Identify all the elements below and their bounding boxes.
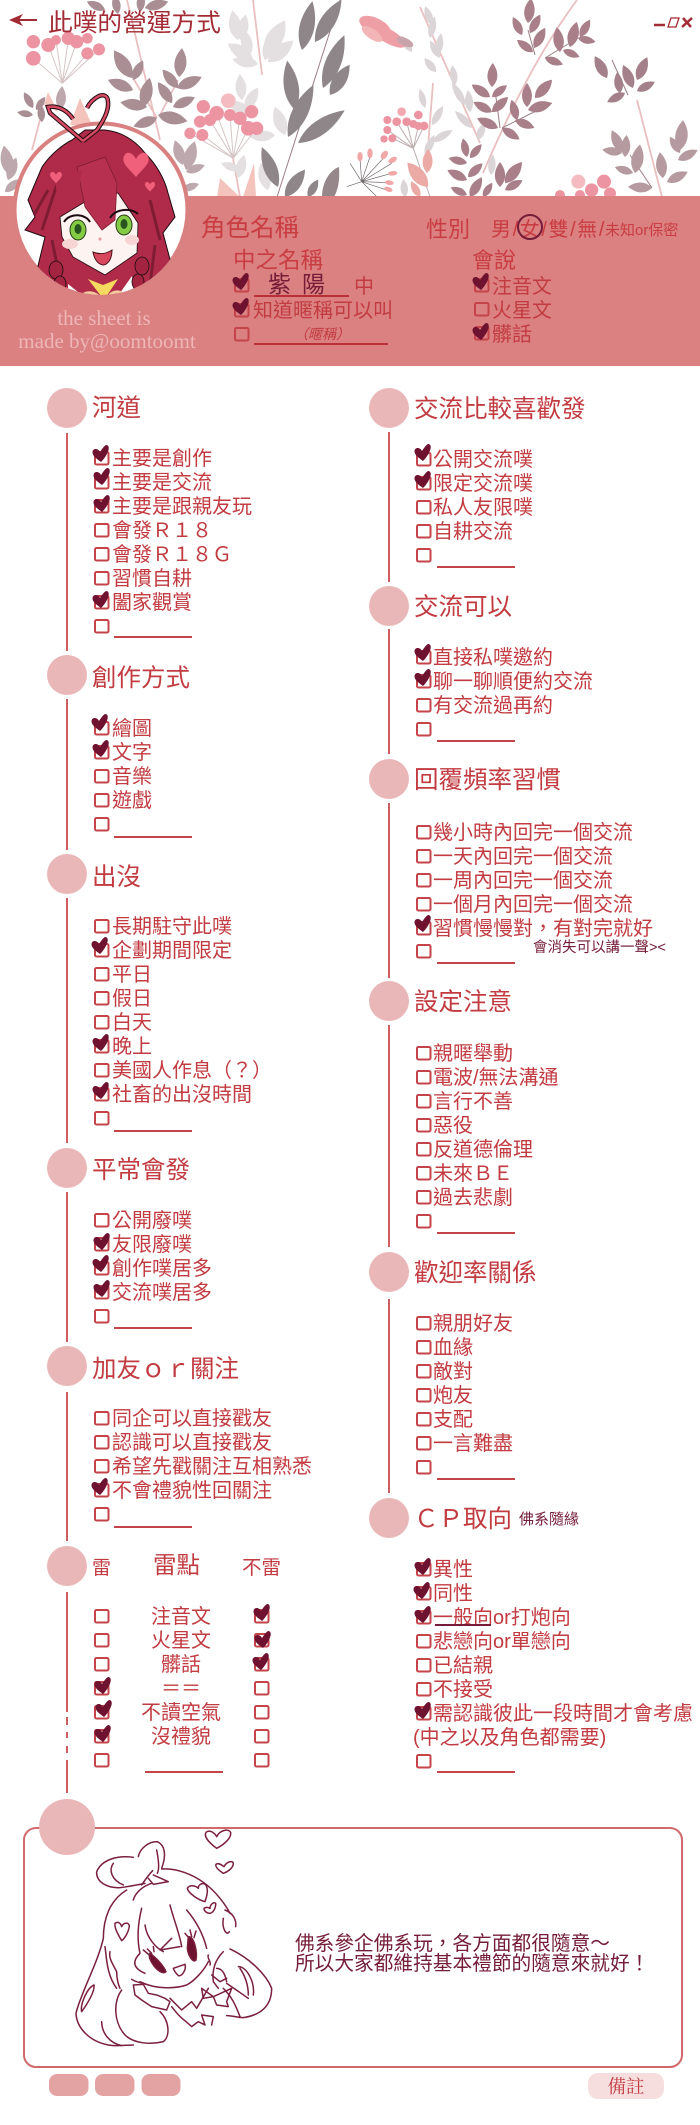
- timeline line: [388, 432, 390, 582]
- option: 晚上 checked: 晚上: [112, 1035, 152, 1058]
- light mauve sprigs: [0, 86, 206, 195]
- row: 不讀空氣: [95, 1700, 268, 1724]
- berry clusters and dandelion right: [347, 107, 616, 200]
- marker circle: [369, 759, 409, 799]
- mauve sprig left: [17, 0, 204, 131]
- field: 會說: 會說: [472, 248, 516, 273]
- section: 創作方式: [47, 655, 192, 850]
- option: 反道德倫理: 反道德倫理: [433, 1138, 533, 1161]
- heading: 回覆頻率習慣: [414, 766, 561, 794]
- marker circle: [369, 1252, 409, 1292]
- option: 友限廢噗 checked: 友限廢噗: [112, 1233, 192, 1256]
- tall gray branch leaves: [256, 0, 355, 201]
- option: blank: [417, 945, 515, 963]
- field: 會說: 注音文: [492, 275, 552, 298]
- option: 認識可以直接戳友: 認識可以直接戳友: [112, 1431, 272, 1454]
- option: blank: [417, 723, 515, 741]
- option: 惡役: 惡役: [433, 1114, 473, 1137]
- field: 會說: 髒話: [492, 323, 532, 346]
- option: 闔家觀賞 checked: 闔家觀賞: [112, 591, 192, 614]
- option: 電波/無法溝通: 電波/無法溝通: [433, 1066, 559, 1089]
- field: 中之名稱: 中之名稱: [233, 248, 323, 273]
- peach leaves right: [402, 149, 433, 199]
- option: 敵對: 敵對: [433, 1360, 473, 1383]
- row: 注音文: [95, 1604, 270, 1628]
- heading: ＣＰ取向: [414, 1505, 512, 1533]
- option: 私人友限噗: 私人友限噗: [433, 496, 533, 519]
- pink bud: [356, 12, 415, 52]
- marker circle: [47, 1546, 87, 1586]
- section: 交流可以: [369, 586, 593, 754]
- option: 音樂: 音樂: [112, 765, 152, 788]
- face: [60, 193, 138, 275]
- marker circle: [47, 854, 87, 894]
- option: 敵對: [417, 1360, 473, 1383]
- option: 文字 checked: [92, 740, 152, 764]
- option: 一言難盡: 一言難盡: [433, 1432, 513, 1455]
- option: 一周內回完一個交流: 一周內回完一個交流: [433, 869, 613, 892]
- option: 習慣慢慢對 checked: 習慣慢慢對，有對完就好: [433, 917, 653, 940]
- heading: 河道: [92, 394, 141, 422]
- timeline line: [388, 1299, 390, 1493]
- timeline line: [388, 803, 390, 978]
- row: 火星文: 火星文: [151, 1629, 211, 1652]
- row: 火星文: [95, 1629, 271, 1652]
- mouth: [93, 250, 112, 265]
- field: 性別: 未知or保密: [605, 222, 678, 239]
- mauve branch right center: [445, 0, 596, 199]
- option: 同企可以直接戳友: 同企可以直接戳友: [112, 1407, 272, 1430]
- option: blank: [417, 1215, 515, 1233]
- section: 交流比較喜歡發: [369, 388, 586, 582]
- mauve sprig far right lower: [602, 120, 700, 193]
- option: blank: [417, 1755, 515, 1772]
- collar: [68, 276, 134, 293]
- row: ==: [94, 1677, 268, 1700]
- option: 繪圖 checked: [92, 714, 152, 740]
- field: 中之名稱: [232, 248, 393, 344]
- field: 中之名稱: 中: [354, 275, 374, 298]
- timeline line: [66, 1192, 68, 1342]
- section: 出沒: [47, 854, 272, 1143]
- heading: 創作方式: [92, 664, 190, 692]
- option: 一般向or打炮向 checked: 一般向or打炮向: [433, 1606, 571, 1629]
- pale vine right of center: [397, 5, 497, 197]
- section: 加友or關注: [47, 1346, 312, 1541]
- option: 晚上 checked: [92, 1034, 152, 1058]
- section: 歡迎率關係: [369, 1252, 536, 1493]
- option: 白天: [95, 1011, 152, 1034]
- column headers: 雷: [92, 1558, 111, 1579]
- field: 會說: [472, 248, 552, 346]
- option: 親朋好友: 親朋好友: [433, 1312, 513, 1335]
- option: 限定交流噗 checked: 限定交流噗: [433, 472, 533, 495]
- option: 有交流過再約: 有交流過再約: [433, 694, 553, 717]
- marker circle: [369, 586, 409, 626]
- field: 中之名稱: 紫陽: [268, 265, 336, 299]
- marker circle: [47, 388, 87, 428]
- column headers: 不雷: [242, 1557, 281, 1579]
- eyes: [64, 215, 90, 222]
- heading: 加友ｏｒ關注: [92, 1355, 239, 1383]
- option: 不會禮貌性回關注 checked: 不會禮貌性回關注: [112, 1479, 272, 1502]
- ahoge: [48, 95, 108, 141]
- timeline line: [66, 433, 68, 651]
- option: 遊戲: [95, 789, 152, 812]
- option: 支配: [417, 1408, 473, 1431]
- option: 音樂: [95, 765, 152, 788]
- row: blank: [95, 1754, 268, 1772]
- option: 親暱舉動: 親暱舉動: [433, 1042, 513, 1065]
- marker circle: [47, 655, 87, 695]
- section: 回覆頻率習慣: [369, 759, 666, 978]
- option: 創作噗居多 checked: 創作噗居多: [112, 1257, 212, 1280]
- option: 一個月內回完一個交流: 一個月內回完一個交流: [433, 893, 633, 916]
- option: 悲戀向or單戀向: 悲戀向or單戀向: [433, 1630, 571, 1653]
- remark text: [295, 1933, 649, 1975]
- footer button: 備註: 備註: [607, 2077, 645, 2098]
- sheet credit: the sheet is: [57, 306, 151, 330]
- marker circle: [39, 1799, 95, 1855]
- option: 希望先戳關注互相熟悉: 希望先戳關注互相熟悉: [112, 1455, 312, 1478]
- timeline line: [388, 1025, 390, 1247]
- option: 公開交流噗 checked: 公開交流噗: [433, 448, 533, 471]
- option: blank: [95, 620, 192, 637]
- option: blank: [95, 1112, 192, 1131]
- heading: 設定注意: [414, 988, 512, 1016]
- remark text: 佛系參企佛系玩，各方面都很隨意～: [295, 1933, 610, 1955]
- panel: remarks: [24, 1799, 682, 2067]
- section: CP取向: [369, 1498, 693, 1772]
- option: 社畜的出沒時間 checked: 社畜的出沒時間: [112, 1083, 252, 1106]
- option: blank: [417, 1461, 515, 1479]
- floral watercolor header illustration: [0, 0, 700, 201]
- heading: 交流可以: [414, 593, 512, 621]
- berry clusters left: [26, 32, 263, 158]
- marker circle: [369, 388, 409, 428]
- row: 髒話: 髒話: [161, 1653, 201, 1676]
- field: 會說: 火星文: [492, 299, 552, 322]
- option: 平日: 平日: [112, 964, 152, 986]
- section: 雷點 table: [47, 1546, 281, 1793]
- marker circle: [47, 1148, 87, 1188]
- option: 交流噗居多 checked: 交流噗居多: [112, 1281, 212, 1304]
- option: 未來BE: 未來ＢＥ: [433, 1162, 513, 1185]
- panel: character info band: [0, 196, 700, 366]
- section: 平常會發: [47, 1148, 212, 1342]
- note: 會消失可以講一聲><: [533, 939, 666, 956]
- option: 假日: [95, 987, 152, 1010]
- timeline line: [66, 699, 68, 850]
- option: 聊一聊順便約交流 checked: 聊一聊順便約交流: [433, 670, 593, 693]
- sheet credit: [18, 306, 196, 353]
- option: 文字 checked: 文字: [112, 741, 152, 764]
- icon: back arrow: [9, 14, 37, 26]
- hair hearts: [123, 153, 149, 177]
- row: 沒禮貌: 沒禮貌: [151, 1725, 211, 1748]
- remark text: 所以大家都維持基本禮節的隨意來就好！: [295, 1953, 649, 1975]
- avatar portrait: [14, 95, 188, 300]
- option: 直接私噗邀約 checked: 直接私噗邀約: [433, 646, 553, 669]
- option: 主要是創作 checked: 主要是創作: [112, 447, 212, 470]
- option: 繪圖 checked: 繪圖: [112, 717, 152, 740]
- timeline line: [66, 1392, 68, 1541]
- speckled leaf: [322, 167, 339, 197]
- option: 已結親: 已結親: [433, 1654, 493, 1677]
- option: 需認識彼此 checked: (中之以及角色都需要): [413, 1726, 606, 1749]
- heading: 出沒: [92, 863, 141, 891]
- option: 假日: 假日: [112, 987, 152, 1010]
- heading: 平常會發: [92, 1156, 190, 1184]
- section: 設定注意: [369, 981, 559, 1247]
- chibi line art: [76, 1830, 272, 2046]
- icon: window controls: [654, 18, 692, 27]
- row: 沒禮貌: [94, 1725, 268, 1748]
- title: 此噗的營運方式: [48, 9, 221, 37]
- option: 需認識彼此 checked: 需認識彼此一段時間才會考慮: [433, 1702, 693, 1725]
- option: 需認識彼此 checked: [413, 1702, 693, 1749]
- bangs: [77, 157, 117, 230]
- option: 美國人作息: 美國人作息（？）: [112, 1059, 272, 1082]
- option: 同性 checked: [414, 1582, 473, 1605]
- row: ==: ＝＝: [161, 1678, 201, 1700]
- option: 不接受: 不接受: [433, 1678, 493, 1701]
- option: blank: [95, 818, 192, 837]
- top nav: back arrow and window controls: [9, 9, 692, 37]
- field: 角色名稱: 角色名稱: [201, 214, 299, 242]
- row: 注音文: 注音文: [151, 1605, 211, 1628]
- marker circle: [47, 1346, 87, 1386]
- option: blank: [417, 549, 515, 567]
- option: blank: [95, 1310, 192, 1328]
- column headers: 雷點: [153, 1552, 200, 1578]
- option: 血緣: 血緣: [433, 1336, 473, 1359]
- option: 支配: 支配: [433, 1408, 473, 1431]
- option: 自耕交流: 自耕交流: [433, 520, 513, 543]
- option: 過去悲劇: 過去悲劇: [433, 1186, 513, 1209]
- option: 異性 checked: 異性: [433, 1558, 473, 1581]
- option: 血緣: [417, 1336, 473, 1359]
- option: 企劃期間限定 checked: 企劃期間限定: [112, 939, 232, 962]
- pale leaves center-left: [220, 9, 298, 191]
- row: 不讀空氣: 不讀空氣: [141, 1701, 221, 1724]
- column headers: [92, 1552, 281, 1579]
- field: 性別: 男/女/雙/無/: [491, 218, 606, 241]
- hair back: [25, 130, 175, 297]
- option: 會發R18: 會發Ｒ１８: [112, 519, 212, 542]
- field: 性別: [426, 215, 678, 242]
- peach leaves: [44, 92, 256, 197]
- marker circle: [369, 1498, 409, 1538]
- stems: [32, 0, 662, 197]
- option: 惡役: [417, 1114, 473, 1137]
- option: 公開交流噗 checked: [414, 444, 533, 471]
- braids: [49, 257, 149, 292]
- sheet credit: made by@oomtoomt: [18, 329, 196, 353]
- heading: 歡迎率關係: [414, 1259, 536, 1287]
- option: 一天內回完一個交流: 一天內回完一個交流: [433, 845, 613, 868]
- option: 習慣自耕: 習慣自耕: [112, 567, 192, 590]
- option: 白天: 白天: [112, 1011, 152, 1034]
- option: 異性 checked: [414, 1558, 473, 1581]
- option: 言行不善: 言行不善: [433, 1090, 513, 1113]
- field: 性別: 性別: [426, 217, 470, 242]
- timeline line: [388, 629, 390, 754]
- marker circle: [369, 981, 409, 1021]
- option: 主要是跟親友玩 checked: 主要是跟親友玩: [112, 495, 252, 518]
- option: 主要是交流 checked: 主要是交流: [112, 471, 212, 494]
- section: 河道: [47, 388, 252, 651]
- option: 幾小時內回完一個交流: 幾小時內回完一個交流: [433, 821, 633, 844]
- footer button: 備註: [588, 2073, 664, 2099]
- timeline line with dashes: [66, 1592, 68, 1793]
- option: 會發R18G: 會發Ｒ１８Ｇ: [112, 543, 232, 566]
- timeline line: [66, 898, 68, 1143]
- option: blank: [95, 1508, 192, 1527]
- heading: 交流比較喜歡發: [414, 395, 586, 423]
- option: 炮友: 炮友: [433, 1384, 473, 1407]
- row: 髒話: [95, 1653, 269, 1676]
- option: 同性 checked: 同性: [433, 1582, 473, 1605]
- option: 長期駐守此噗: 長期駐守此噗: [112, 915, 232, 938]
- note: 佛系隨緣: [519, 1511, 579, 1528]
- mauve sprig far right upper: [590, 54, 657, 106]
- option: 遊戲: 遊戲: [112, 789, 152, 812]
- footer tab buttons: [49, 2074, 180, 2096]
- field: 中之名稱: 知道暱稱可以叫: [253, 299, 393, 322]
- option: 公開廢噗: 公開廢噗: [112, 1209, 192, 1232]
- option: 炮友: [417, 1384, 473, 1407]
- field: 中之名稱: （暱稱）: [294, 326, 350, 342]
